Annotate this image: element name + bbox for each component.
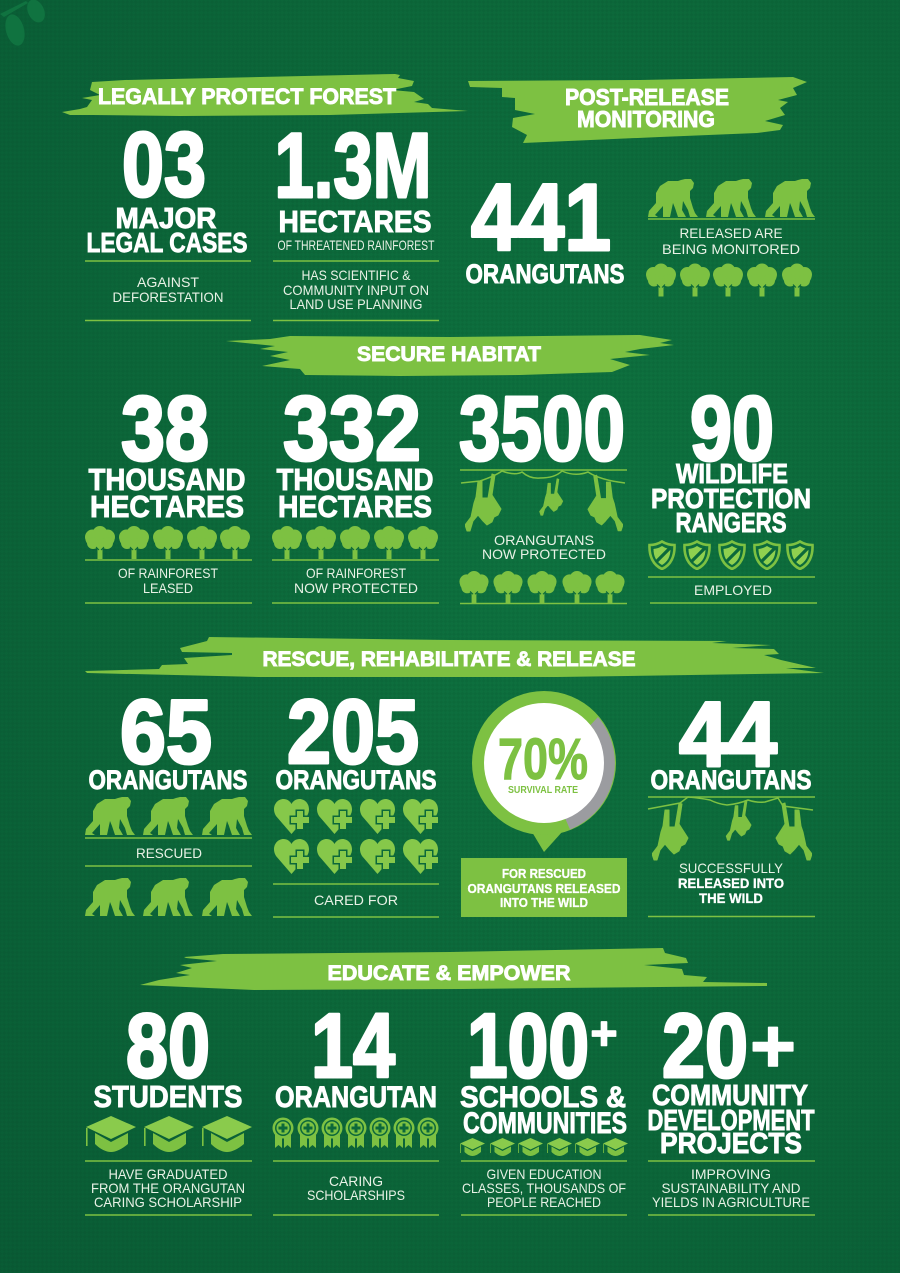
panel: post-release monitoring [466, 77, 815, 296]
stat: 332 thousand hectares: NOW PROTECTED [294, 580, 418, 596]
stat: 90 wildlife protection rangers: RANGERS [676, 507, 786, 538]
stat: 14 orangutan caring scholarships: 14 [311, 996, 395, 1097]
stat: 14 orangutan caring scholarships: CARING [329, 1173, 383, 1189]
heading banner: legally protect forest [62, 74, 468, 116]
stat: 80 students: 80 [126, 996, 210, 1097]
icon row: trees [459, 571, 625, 603]
icon row: trees [85, 526, 250, 559]
stat: 1.3M hectares: OF THREATENED RAINFOREST [278, 237, 435, 253]
stat: 100+ schools and communities: SCHOOLS & [460, 1081, 626, 1114]
stat: 80 students: CARING SCHOLARSHIP [94, 1194, 242, 1210]
stat: 100+ schools and communities [460, 996, 628, 1215]
panel: educate and empower [85, 948, 815, 1215]
heading banner: educate and empower [140, 948, 767, 990]
text: released are being monitored [662, 225, 800, 257]
stat: 38 thousand hectares: HECTARES [90, 489, 244, 524]
stat: 38 thousand hectares: 38 [121, 378, 209, 480]
stat: 441 orangutans: 441 [471, 165, 611, 271]
heading banner: post-release monitoring: MONITORING [577, 106, 715, 132]
stat: 3500 orangutans now protected: ORANGUTANS [494, 532, 594, 548]
icon row: orangutans [85, 797, 252, 835]
stat: 80 students: HAVE GRADUATED [108, 1166, 228, 1182]
stat: 20+ community development projects: IMPROVING [691, 1166, 771, 1182]
stat: 100+ schools and communities: 100 [467, 996, 589, 1097]
stat: 14 orangutan caring scholarships: SCHOLARSHIPS [307, 1187, 405, 1203]
stat: 20+ community development projects [648, 996, 815, 1215]
stat: 03 major legal cases: DEFORESTATION [112, 289, 224, 305]
icon row: trees [272, 526, 438, 559]
stat: 1.3M hectares: HAS SCIENTIFIC & [302, 267, 411, 283]
icon row: graduation caps [86, 1116, 252, 1152]
heading banner: secure habitat: SECURE HABITAT [357, 343, 541, 366]
stat: 44 orangutans released: SUCCESSFULLY [679, 860, 784, 876]
stat: 44 orangutans released: THE WILD [699, 890, 763, 906]
stat: 20+ community development projects: DEVELOPMENT [648, 1105, 815, 1137]
heading banner: rescue, rehabilitate and release [85, 637, 824, 677]
stat: 1.3M hectares: COMMUNITY INPUT ON [283, 282, 429, 298]
stat: 1.3M hectares [273, 115, 439, 320]
stat: 44 orangutans released [648, 684, 815, 916]
stat: 80 students: FROM THE ORANGUTAN [91, 1180, 245, 1196]
callout: for rescued orangutans released into the wild: FOR RESCUED [502, 866, 586, 881]
stat: 44 orangutans released: RELEASED INTO [678, 875, 784, 891]
icon: hanging orangutans on vines [461, 471, 625, 531]
stat: 441 orangutans: ORANGUTANS [466, 259, 624, 289]
stat: 100+ schools and communities: + [590, 1007, 618, 1059]
stat: 90 wildlife protection rangers [648, 378, 817, 603]
stat: 65 orangutans rescued: 65 [120, 682, 212, 783]
stat: 3500 orangutans now protected: NOW PROTECTED [482, 546, 606, 562]
heading banner: secure habitat [226, 335, 674, 376]
stat: 205 orangutans cared for: CARED FOR [314, 892, 398, 908]
stat: 44 orangutans released: ORANGUTANS [650, 765, 812, 795]
stat: 20+ community development projects: COMMUNITY [652, 1080, 808, 1112]
heading banner: legally protect forest: LEGALLY PROTECT FOREST [98, 84, 397, 109]
panel: legally protect forest [62, 74, 468, 320]
stat: 332 thousand hectares [272, 378, 439, 603]
heading banner: post-release monitoring: POST-RELEASE [565, 84, 729, 110]
text: released are being monitored: RELEASED ARE [680, 225, 782, 241]
stat: 38 thousand hectares: THOUSAND [88, 462, 246, 497]
stat: 80 students [85, 996, 252, 1215]
stat: 100+ schools and communities: PEOPLE REACHED [487, 1194, 601, 1210]
stat: 14 orangutan caring scholarships [272, 996, 439, 1215]
stat: 205 orangutans cared for [273, 682, 439, 917]
chart: 70% survival rate donut [472, 691, 616, 852]
icon row: shields [649, 542, 813, 569]
stat: 38 thousand hectares [85, 378, 252, 603]
stat: 90 wildlife protection rangers: 90 [690, 378, 774, 480]
stat: 80 students: STUDENTS [94, 1079, 242, 1114]
text: released are being monitored: BEING MONITORED [662, 241, 800, 257]
stat: 332 thousand hectares: OF RAINFOREST [306, 565, 406, 581]
stat: 20+ community development projects: 20 [662, 996, 748, 1097]
icon: hanging orangutans on vines [648, 797, 813, 860]
stat: 1.3M hectares: 1.3M [274, 115, 432, 217]
callout: for rescued orangutans released into the wild [461, 858, 627, 917]
stat: 65 orangutans rescued: ORANGUTANS [88, 765, 248, 795]
stat: 90 wildlife protection rangers: WILDLIFE [676, 458, 788, 489]
stat: 38 thousand hectares: LEASED [143, 580, 193, 596]
callout: for rescued orangutans released into the wild: INTO THE WILD [500, 895, 588, 910]
stat: 3500 orangutans now protected: 3500 [459, 378, 625, 480]
stat: 44 orangutans released: 44 [679, 684, 777, 786]
stat: 205 orangutans cared for: ORANGUTANS [276, 765, 436, 795]
callout: for rescued orangutans released into the wild: ORANGUTANS RELEASED [468, 881, 620, 896]
icon row: orangutans [85, 878, 252, 916]
stat: 03 major legal cases: LEGAL CASES [86, 227, 248, 258]
icon row: small graduation caps [460, 1138, 628, 1156]
heading banner: post-release monitoring [468, 77, 807, 143]
stat: 332 thousand hectares: HECTARES [278, 489, 432, 524]
stat: 100+ schools and communities: COMMUNITIES [463, 1107, 627, 1140]
stat: 03 major legal cases: 03 [122, 114, 206, 216]
stat: 90 wildlife protection rangers: PROTECTION [651, 483, 811, 514]
stat: 205 orangutans cared for: 205 [287, 682, 419, 783]
heading banner: educate and empower: EDUCATE & EMPOWER [328, 962, 570, 985]
heading banner: rescue, rehabilitate and release: RESCUE, REHABILITATE & RELEASE [262, 648, 636, 671]
stat: 38 thousand hectares: OF RAINFOREST [118, 565, 218, 581]
stat: 332 thousand hectares: 332 [283, 378, 421, 480]
stat: 100+ schools and communities: GIVEN EDUCATION [486, 1166, 602, 1182]
icon: decorative leaves [0, 0, 48, 48]
chart: 70% survival rate donut: 70% [498, 727, 588, 792]
icon row: badges [272, 1118, 438, 1148]
stat: 332 thousand hectares: THOUSAND [276, 462, 434, 497]
stat: 20+ community development projects: PROJECTS [660, 1128, 802, 1160]
stat: 90 wildlife protection rangers: EMPLOYED [694, 582, 772, 598]
chart: 70% survival rate donut: SURVIVAL RATE [508, 784, 578, 796]
stat: 3500 orangutans now protected [459, 378, 627, 604]
stat: 03 major legal cases [85, 114, 251, 320]
stat: 1.3M hectares: LAND USE PLANNING [290, 296, 422, 312]
stat: 65 orangutans rescued [85, 682, 252, 916]
stat: 65 orangutans rescued: RESCUED [136, 845, 202, 861]
icon row: orangutans on ground line [648, 179, 815, 219]
icon row: trees [646, 264, 812, 296]
panel: secure habitat [85, 335, 817, 604]
panel: rescue, rehabilitate and release [85, 637, 824, 917]
stat: 20+ community development projects: + [750, 1004, 796, 1089]
stat: 20+ community development projects: YIELDS IN AGRICULTURE [652, 1194, 810, 1210]
stat: 14 orangutan caring scholarships: ORANGUTAN [275, 1081, 437, 1114]
stat: 20+ community development projects: SUSTAINABILITY AND [662, 1180, 800, 1196]
stat: 03 major legal cases: MAJOR [116, 203, 217, 235]
stat: 03 major legal cases: AGAINST [137, 274, 199, 290]
stat: 100+ schools and communities: CLASSES, THOUSANDS OF [462, 1180, 626, 1196]
icon grid: hearts with crosses [274, 799, 438, 874]
stat: 1.3M hectares: HECTARES [278, 204, 432, 239]
